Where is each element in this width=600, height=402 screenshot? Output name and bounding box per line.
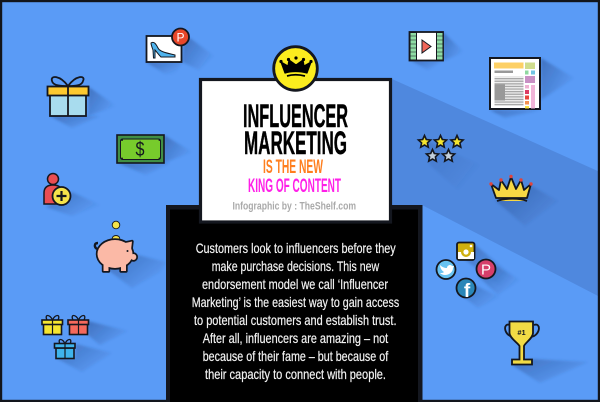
icon: film strip bbox=[410, 32, 464, 70]
icon: crown bbox=[489, 175, 558, 226]
icon: social media cluster bbox=[436, 242, 520, 308]
stars: bottom row bbox=[426, 150, 455, 161]
shadow: gifts bbox=[88, 321, 128, 345]
icon: three gifts bbox=[42, 316, 128, 372]
description text: to potential customers and establish trust. bbox=[194, 313, 396, 328]
credit: Infographic by : TheShelf.com bbox=[232, 200, 356, 212]
description text: After all, influencers are amazing – not bbox=[203, 331, 388, 346]
gift: blue bbox=[54, 340, 75, 358]
instagram bbox=[457, 242, 474, 260]
pinterest: P bbox=[481, 262, 491, 278]
badge: crown circle bbox=[274, 47, 317, 90]
icon: trophy: #1 bbox=[517, 328, 526, 337]
description text: make purchase decisions. This new bbox=[212, 259, 379, 274]
long shadow of central panel bbox=[392, 79, 600, 297]
title: MARKETING bbox=[244, 125, 347, 161]
subtitle magenta: KING OF CONTENT bbox=[248, 176, 341, 197]
panel: black description bbox=[166, 205, 422, 402]
title bbox=[243, 98, 348, 161]
stars: top row bbox=[418, 136, 463, 147]
icon: gift box bbox=[48, 77, 116, 128]
description text: endorsement model we call ‘Influencer bbox=[202, 277, 388, 292]
gift: yellow bbox=[42, 316, 62, 334]
icon: trophy bbox=[505, 322, 588, 383]
icon: piggy bank with coin bbox=[95, 221, 166, 288]
description text: because of their fame – but because of bbox=[203, 349, 388, 364]
icon: dollar bill bbox=[117, 135, 192, 175]
subtitle orange: IS THE NEW bbox=[263, 157, 323, 178]
twitter bbox=[436, 260, 456, 279]
icon: newspaper page bbox=[490, 58, 574, 118]
icon: person with plus bbox=[44, 174, 100, 216]
description text: Customers look to influencers before they bbox=[196, 241, 396, 256]
facebook: f bbox=[464, 281, 471, 302]
title: INFLUENCER bbox=[243, 98, 348, 134]
icon: star rating bbox=[418, 136, 480, 190]
icon: shoe photo with pinterest badge bbox=[146, 28, 214, 74]
description text bbox=[192, 241, 399, 382]
panel: white title card bbox=[200, 80, 390, 222]
icon: dollar bill: $ bbox=[136, 139, 144, 161]
description text: Marketing’ is the easiest way to gain access bbox=[192, 295, 399, 310]
gift: red bbox=[68, 316, 88, 334]
icon: shoe photo with pinterest badge: P bbox=[176, 30, 185, 44]
description text: their capacity to connect with people. bbox=[205, 367, 386, 382]
